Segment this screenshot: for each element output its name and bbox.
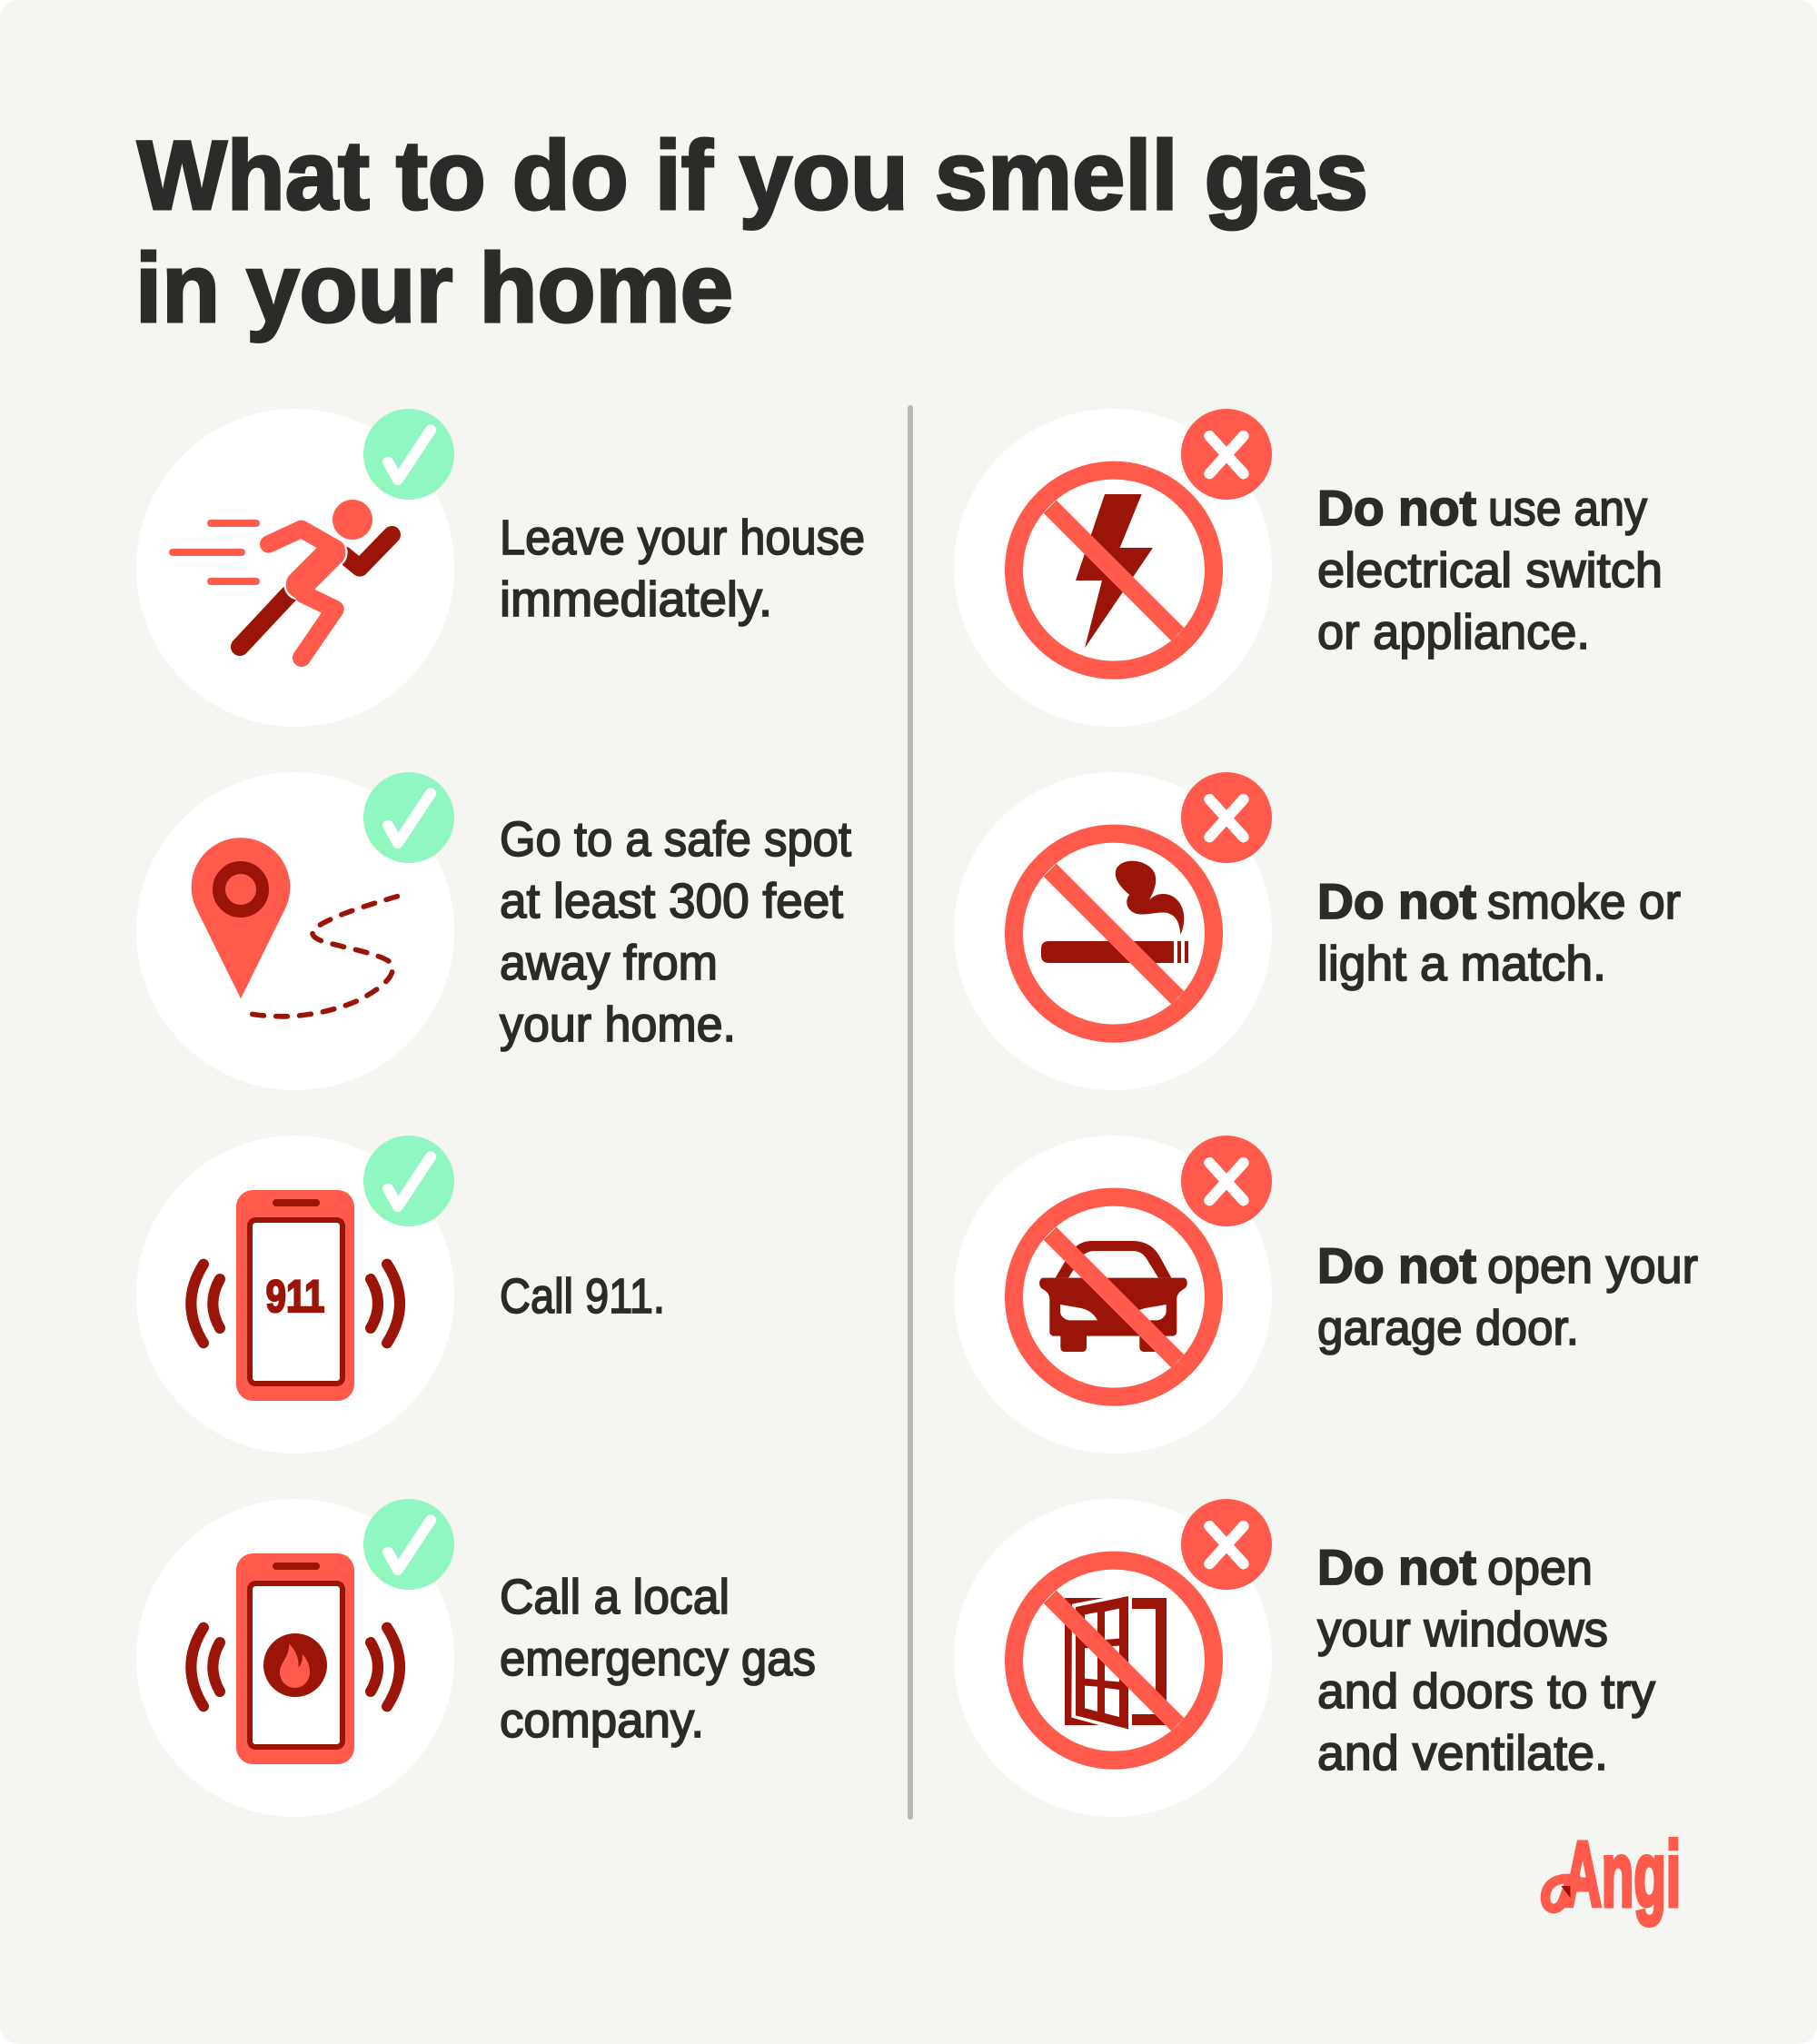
text: no electrical switches: use any — [1488, 481, 1647, 536]
icon: prohibited car — [954, 1136, 1272, 1454]
text: no garage door: Do not — [1317, 1237, 1476, 1294]
panel: no smoking — [954, 772, 1681, 1090]
text: no smoking: Do not — [1317, 873, 1476, 929]
logo: Angi — [1545, 1824, 1681, 1926]
text: no smoking: smoke or — [1487, 875, 1681, 929]
icon: prohibited lightning bolt — [954, 409, 1272, 727]
text: go to a safe spot: Go to a safe spot — [500, 812, 851, 867]
title — [135, 120, 1368, 342]
text: no ventilating — [1317, 1539, 1655, 1781]
text: call gas company: company. — [500, 1693, 704, 1748]
title: What to do if you smell gas — [137, 120, 1368, 230]
text: no smoking: light a match. — [1317, 937, 1606, 991]
text: leave your house: immediately. — [500, 572, 772, 627]
text: call gas company: Call a local — [500, 1570, 730, 1624]
text: go to a safe spot: away from — [500, 936, 718, 990]
text: no garage door: garage door. — [1317, 1301, 1579, 1355]
text: no smoking — [1317, 873, 1681, 991]
icon: phone with flame — [136, 1499, 454, 1817]
text: go to a safe spot: your home. — [500, 997, 736, 1052]
panel: leave your house — [136, 409, 865, 727]
title: in your home — [135, 233, 733, 342]
icon: runner — [136, 409, 454, 727]
text: no ventilating: your windows — [1317, 1602, 1608, 1657]
column divider — [908, 405, 913, 1820]
panel: no electrical switches — [954, 409, 1663, 727]
text: no electrical switches: electrical switch — [1317, 543, 1663, 598]
icon: prohibited cigarette — [954, 772, 1272, 1090]
text: go to a safe spot: at least 300 feet — [500, 874, 843, 928]
icon: prohibited door — [954, 1499, 1272, 1817]
text: no electrical switches: Do not — [1317, 480, 1476, 536]
text: leave your house: Leave your house — [500, 511, 865, 565]
icon: map pin and dashed route — [136, 772, 454, 1090]
panel: call gas company — [136, 1499, 816, 1817]
text: leave your house — [500, 511, 865, 627]
panel: go to a safe spot — [136, 772, 851, 1090]
text: no ventilating: open — [1487, 1541, 1593, 1595]
panel: no garage door — [954, 1136, 1698, 1454]
panel: no ventilating — [954, 1499, 1655, 1817]
icon: phone with 911 — [136, 1136, 454, 1454]
text: no garage door: open your — [1487, 1239, 1698, 1294]
text: call gas company: emergency gas — [500, 1632, 816, 1686]
text: no electrical switches: or appliance. — [1317, 605, 1590, 660]
text: no ventilating: and doors to try — [1317, 1664, 1655, 1719]
logo: Angi: Angi — [1564, 1824, 1681, 1926]
text: no ventilating: Do not — [1317, 1539, 1476, 1595]
text: no garage door — [1317, 1237, 1698, 1355]
text: no electrical switches — [1317, 480, 1663, 660]
text: go to a safe spot — [500, 812, 851, 1052]
icon: phone with 911: 911 — [266, 1271, 324, 1322]
panel: call 911 — [136, 1136, 665, 1454]
text: no ventilating: and ventilate. — [1317, 1726, 1608, 1781]
text: call gas company — [500, 1570, 816, 1748]
text: call 911: Call 911. — [500, 1269, 665, 1324]
